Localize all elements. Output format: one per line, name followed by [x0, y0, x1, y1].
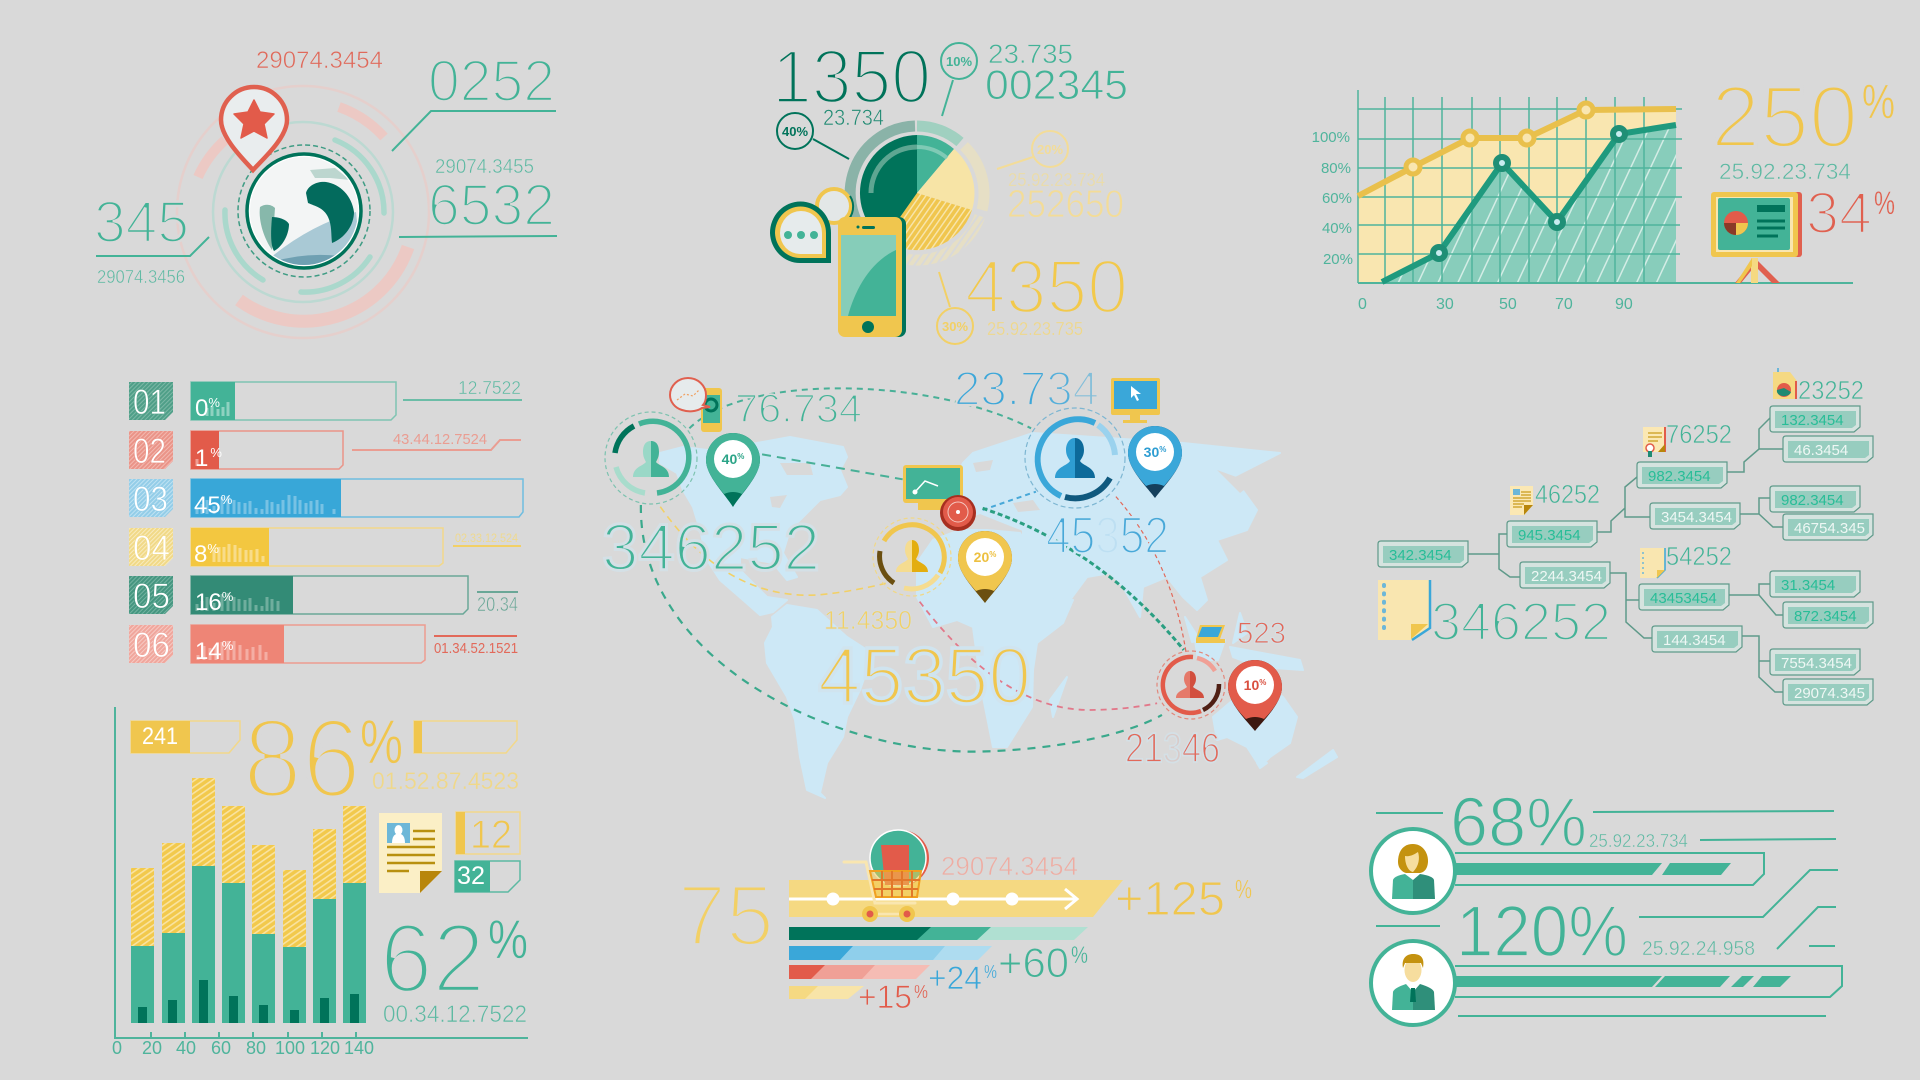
value: +125%: % — [1235, 874, 1252, 904]
value: 1350: 1350 — [772, 35, 931, 120]
value: 4350: 4350 — [965, 245, 1128, 330]
value: 120%: 120% — [1456, 892, 1628, 972]
x axis labels: 70 — [1555, 296, 1573, 313]
map pin: 10%: 10 — [1244, 677, 1259, 693]
panel: stacked bar chart — [112, 696, 528, 1058]
x axis labels: 0 — [112, 1038, 122, 1058]
value: 25.92.23.734: 25.92.23.734 — [1008, 170, 1105, 190]
row 02: 43.44.12.7524 — [393, 432, 487, 448]
map inland seas — [770, 460, 1253, 512]
value: 0252: 0252 — [428, 49, 555, 114]
value: 25.92.23.734: 25.92.23.734 — [1719, 159, 1851, 184]
node: 46754.345: 46754.345 — [1794, 520, 1865, 537]
axes — [115, 707, 528, 1038]
icon: phone with bubble — [670, 378, 722, 432]
person ring: red — [1157, 651, 1225, 719]
area fills — [1358, 109, 1676, 283]
icon: chalkboard and target — [903, 465, 976, 531]
bars: yellow hatch — [131, 778, 366, 947]
value: +15%: % — [914, 982, 928, 1002]
node: 144.3454 — [1652, 626, 1742, 652]
value: 6532: 6532 — [428, 173, 555, 238]
value: 68%: 68% — [1450, 783, 1587, 861]
node: 46.3454: 46.3454 — [1794, 442, 1848, 459]
y axis labels: 60% — [1322, 190, 1352, 207]
node: 43453454: 43453454 — [1650, 590, 1717, 607]
value: 29074.3454: 29074.3454 — [256, 47, 383, 74]
node: 46754.345 — [1783, 514, 1873, 540]
row 03: % — [221, 492, 233, 507]
x axis labels — [112, 1038, 374, 1058]
row 06 — [129, 625, 518, 665]
bars: teal — [131, 866, 366, 1023]
icon: chart document — [1773, 368, 1797, 399]
value: 250%: % — [1862, 76, 1895, 129]
node: 982.3454: 982.3454 — [1648, 468, 1711, 485]
node: 46.3454 — [1783, 436, 1873, 462]
y axis labels — [1312, 129, 1353, 268]
row 06: % — [222, 638, 234, 653]
row 04: 8 — [194, 541, 207, 568]
value: 345: 345 — [94, 190, 189, 255]
value: 45352: 45352 — [1046, 507, 1169, 565]
icon: speech bubble — [770, 201, 831, 263]
chart grid — [1358, 90, 1853, 283]
value: 29074.3455: 29074.3455 — [435, 156, 534, 178]
value: 76252: 76252 — [1666, 419, 1732, 449]
person ring: green — [605, 412, 697, 504]
map pin: 10% — [1228, 660, 1282, 731]
avatar: woman — [1371, 829, 1455, 913]
value: 01.52.87.4523: 01.52.87.4523 — [372, 768, 519, 795]
node: 7554.3454: 7554.3454 — [1781, 655, 1852, 672]
node: 342.3454 — [1378, 541, 1468, 567]
icon: star pin — [221, 87, 287, 170]
row 01: 0 — [195, 395, 208, 422]
line series: yellow — [1358, 103, 1676, 196]
y axis labels: 20% — [1323, 251, 1353, 268]
node: 982.3454 lower: 982.3454 — [1781, 492, 1844, 509]
node: 7554.3454 — [1770, 649, 1860, 675]
value: 54252: 54252 — [1666, 541, 1732, 571]
value: 75: 75 — [678, 868, 774, 964]
row 01: 01 — [133, 383, 166, 422]
node: 3454.3454 — [1650, 503, 1740, 529]
box: 12: 12 — [470, 813, 512, 857]
row 02: 1 — [195, 445, 208, 472]
pie chart — [850, 126, 984, 260]
panel: tree diagram — [1378, 368, 1873, 705]
map pin: 30% — [1128, 426, 1182, 498]
x axis labels: 0 — [1358, 296, 1367, 313]
node: 29074.345 — [1783, 679, 1873, 705]
row 04 — [129, 528, 521, 568]
icon: monitor — [1111, 378, 1160, 423]
outer rings — [177, 86, 429, 338]
map pin: 30%: % — [1159, 445, 1166, 454]
node: 872.3454 — [1783, 602, 1873, 628]
panel: people stats — [1371, 783, 1842, 1025]
icon: certificate — [1643, 427, 1666, 457]
node: 31.3454: 31.3454 — [1781, 577, 1835, 594]
bar row: green — [789, 927, 1088, 940]
box: 12 — [456, 812, 520, 857]
icon: notebook — [1378, 580, 1430, 640]
row 06: 14 — [195, 638, 222, 665]
value: 21346: 21346 — [1125, 724, 1220, 771]
node: 945.3454 — [1507, 521, 1597, 547]
callout: 20% — [997, 131, 1068, 169]
network connections — [641, 388, 1186, 752]
value: 0252 — [392, 49, 556, 151]
x axis labels: 20 — [142, 1038, 162, 1058]
row 05 — [129, 576, 518, 616]
bars: dark — [138, 980, 359, 1023]
value: 86%: 86 — [243, 696, 361, 821]
icon: phone — [838, 217, 906, 337]
x axis labels: 140 — [344, 1038, 374, 1058]
x axis labels — [1358, 296, 1633, 313]
x axis labels: 40 — [176, 1038, 196, 1058]
x axis labels: 50 — [1499, 296, 1517, 313]
value: +60%: +60 — [998, 939, 1069, 986]
progress frame: top — [1455, 853, 1764, 885]
value: 23252: 23252 — [1798, 375, 1864, 405]
panel: shopping bars — [678, 830, 1252, 1015]
value: +125%: +125 — [1115, 873, 1225, 926]
panel: pie and phone — [770, 35, 1128, 344]
x axis labels: 100 — [275, 1038, 305, 1058]
panel: line chart — [1312, 67, 1895, 313]
node: 2244.3454: 2244.3454 — [1531, 568, 1602, 585]
map pin: 20% — [958, 531, 1012, 603]
panel: globe radial — [94, 47, 557, 338]
decorative lines — [1376, 811, 1838, 1016]
box: 241 — [131, 721, 240, 753]
world map — [660, 433, 1337, 798]
row 02 — [129, 431, 521, 472]
map pin: 20%: 20 — [974, 549, 989, 565]
node: 2244.3454 — [1520, 562, 1610, 588]
icon: laptop — [1196, 625, 1225, 643]
value: 62%: % — [488, 908, 528, 970]
y axis labels: 100% — [1312, 129, 1350, 146]
person ring: blue — [1025, 408, 1125, 508]
value: 45350: 45350 — [818, 631, 1031, 720]
row 03 — [129, 479, 523, 519]
node: 982.3454 — [1637, 462, 1727, 488]
value: +24%: % — [984, 962, 997, 982]
box: 32 — [455, 861, 520, 892]
icon: profile document — [379, 813, 442, 893]
row 04: % — [207, 541, 219, 556]
icon: note — [1640, 548, 1665, 578]
node: 132.3454 — [1770, 406, 1860, 432]
value: 11.4350: 11.4350 — [824, 605, 912, 635]
node: 982.3454 lower — [1770, 486, 1860, 512]
value: 29074.3456: 29074.3456 — [97, 267, 185, 287]
icon: magnifier — [817, 189, 853, 223]
x axis labels: 90 — [1615, 296, 1633, 313]
line series: green — [1382, 125, 1676, 282]
callout: 40% — [777, 113, 849, 159]
x axis labels: 80 — [246, 1038, 266, 1058]
value: 002345: 002345 — [985, 61, 1128, 108]
row 05: % — [222, 589, 234, 604]
node: 3454.3454: 3454.3454 — [1661, 509, 1732, 526]
icon: globe — [247, 154, 362, 272]
node: 342.3454: 342.3454 — [1389, 547, 1452, 564]
icon: shopping cart — [844, 830, 929, 922]
value: 86%: % — [360, 708, 403, 777]
box: 32: 32 — [457, 862, 485, 890]
map pin: 40% — [706, 433, 760, 507]
node: 872.3454: 872.3454 — [1794, 608, 1857, 625]
value: 00.34.12.7522: 00.34.12.7522 — [383, 1001, 527, 1028]
value: 25.92.24.958: 25.92.24.958 — [1642, 938, 1755, 960]
panel: world map network — [602, 363, 1337, 798]
row 01: 12.7522 — [458, 378, 521, 398]
row 05: 05 — [133, 577, 170, 616]
map pin: 20%: % — [989, 550, 996, 559]
callout: 20%: 20% — [1037, 142, 1063, 157]
callout: 10%: 10% — [946, 54, 972, 69]
row 03: 03 — [133, 480, 168, 519]
value: 523: 523 — [1237, 617, 1286, 650]
connectors — [1468, 418, 1783, 692]
box: empty yellow — [414, 721, 517, 753]
row 03: 45 — [194, 492, 221, 519]
map pin: 40%: 40 — [722, 451, 737, 467]
row 01: % — [208, 395, 220, 410]
bar row: red — [789, 965, 930, 979]
node: 43453454 — [1639, 584, 1729, 610]
node: 31.3454 — [1770, 571, 1860, 597]
row 05: 16 — [195, 589, 222, 616]
value: 34%: % — [1874, 185, 1895, 221]
value: 62%: 62 — [380, 903, 485, 1013]
icon: presentation board — [1711, 192, 1802, 283]
value: 252650: 252650 — [1007, 183, 1124, 226]
callout: 40%: 40% — [782, 124, 808, 139]
value: +15%: +15 — [858, 979, 912, 1015]
value: 29074.3454: 29074.3454 — [941, 851, 1078, 881]
row 02: % — [210, 445, 222, 460]
value: +24%: +24 — [928, 960, 982, 996]
value: 25.92.23.734: 25.92.23.734 — [1589, 831, 1688, 851]
node: 132.3454: 132.3454 — [1781, 412, 1844, 429]
bar row: blue — [789, 946, 992, 960]
y axis labels: 40% — [1322, 220, 1352, 237]
value: 23.734: 23.734 — [823, 105, 884, 130]
row 06: 01.34.52.1521 — [434, 641, 518, 657]
y axis labels: 80% — [1321, 160, 1351, 177]
node: 29074.345: 29074.345 — [1794, 685, 1865, 702]
map pin: 30%: 30 — [1144, 444, 1159, 460]
map pin: 40%: % — [737, 452, 744, 461]
row 04: 02.33.12.524 — [455, 531, 518, 545]
person ring: yellow — [873, 518, 951, 596]
value: 34%: 34 — [1806, 181, 1872, 246]
value: 25.92.23.735: 25.92.23.735 — [987, 319, 1083, 339]
value: 346252: 346252 — [1431, 592, 1611, 652]
row 01 — [129, 378, 522, 422]
row 04: 04 — [133, 529, 170, 568]
value: 346252: 346252 — [602, 510, 820, 584]
value: +60%: % — [1071, 942, 1088, 969]
panel: progress list — [129, 378, 523, 665]
map pin: 10%: % — [1259, 678, 1266, 687]
x axis labels: 30 — [1436, 296, 1454, 313]
value: 250%: 250 — [1711, 67, 1858, 166]
x axis labels: 60 — [211, 1038, 231, 1058]
callout: 10% — [941, 43, 977, 116]
row 06: 06 — [133, 626, 170, 665]
icon: document — [1510, 486, 1533, 515]
node: 945.3454: 945.3454 — [1518, 527, 1581, 544]
node: 144.3454: 144.3454 — [1663, 632, 1726, 649]
value: 46252: 46252 — [1535, 479, 1600, 509]
row 05: 20.34 — [477, 594, 518, 616]
callout: 30% — [937, 272, 973, 344]
value: 23.734: 23.734 — [954, 363, 1099, 416]
box: 241: 241 — [142, 723, 178, 750]
row 02: 02 — [133, 432, 166, 471]
value: 23.735: 23.735 — [988, 39, 1073, 69]
bar row: yellow — [789, 986, 864, 999]
x axis labels: 120 — [310, 1038, 340, 1058]
value: 76.734: 76.734 — [735, 387, 862, 431]
callout: 30%: 30% — [942, 319, 968, 334]
progress frame: bottom — [1455, 966, 1842, 997]
avatar: man — [1371, 941, 1455, 1025]
arrow bar — [789, 880, 1123, 917]
